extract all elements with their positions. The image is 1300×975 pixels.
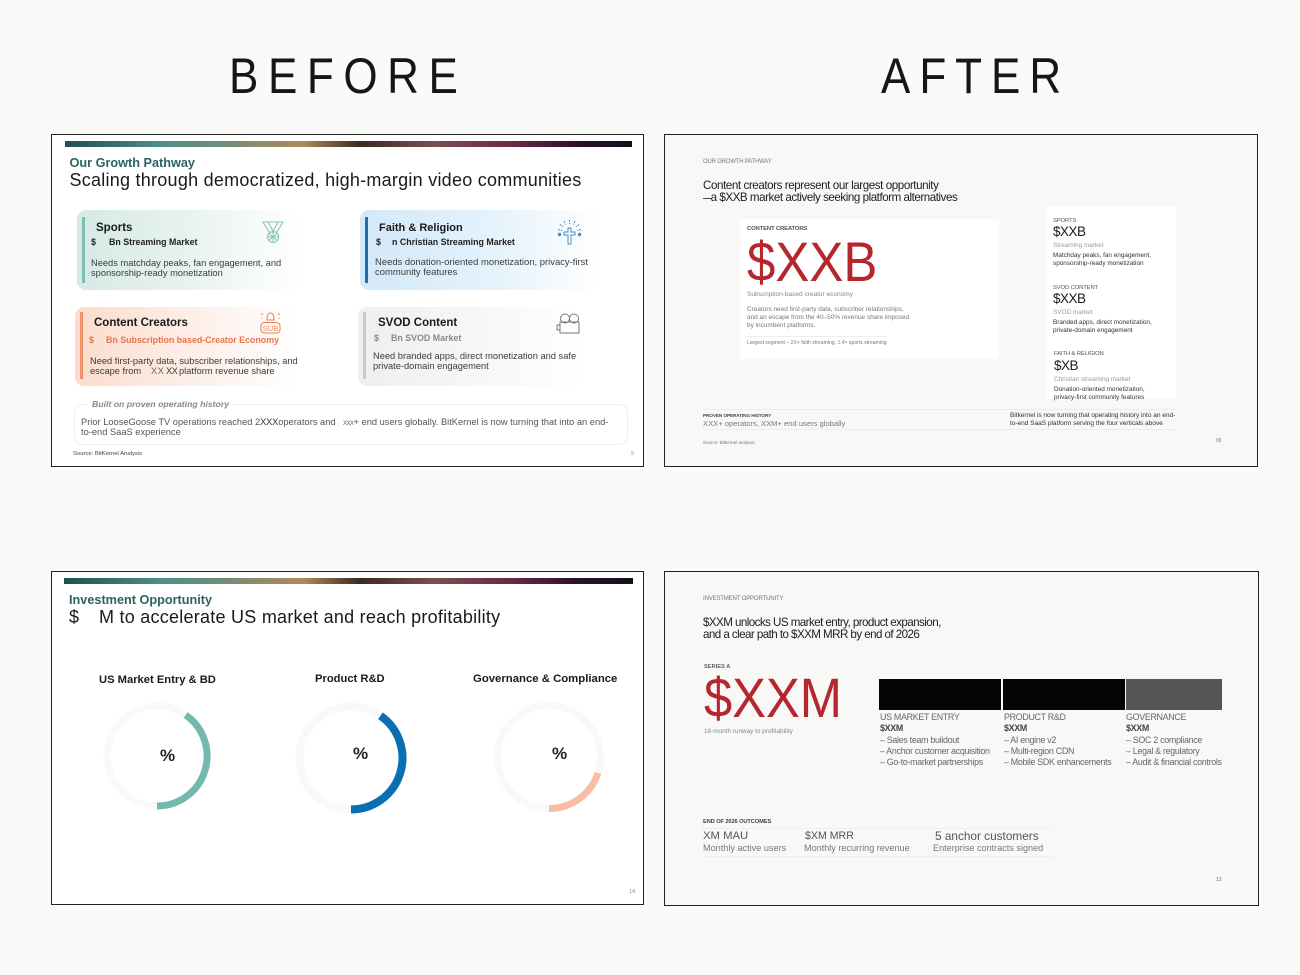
card: sports [77, 210, 302, 290]
icon: film camera [556, 314, 580, 334]
slide eyebrow: Investment Opportunity [69, 592, 212, 606]
card: content creators: Need first-party data, subscriber relationships, and [90, 356, 298, 366]
strip: proven operating history: to-end SaaS platform serving the four verticals above [1010, 420, 1163, 427]
slide title: Scaling through democratized, high-margin video communities [70, 170, 582, 190]
outcomes heading: END OF 2026 OUTCOMES [703, 818, 771, 824]
outcomes strip: Monthly active users [703, 843, 786, 853]
vertical: sports: sponsorship-ready monetization [1053, 260, 1144, 267]
card: content creators: Bn Subscription based-Creator Economy [106, 335, 279, 345]
hero number: $XXM [704, 666, 842, 729]
card: content creators hero: Largest segment – 2X+ faith streaming, 1.4× sports streaming [747, 340, 887, 346]
strip: proven operating history [703, 409, 1176, 430]
slide eyebrow: INVESTMENT OPPORTUNITY [703, 595, 783, 602]
outcomes strip: Enterprise contracts signed [933, 843, 1043, 853]
vertical: svod content: private-domain engagement [1053, 327, 1133, 334]
card: sports: Sports [96, 222, 132, 234]
donut chart: product r and d [351, 712, 407, 814]
icon: subscribe bell: SUB [263, 324, 278, 333]
strip: proven operating history: XXX+ operators, XXM+ end users globally [703, 419, 845, 428]
column: governance [1126, 712, 1222, 767]
column: product r and d: – Mobile SDK enhancements [1004, 757, 1111, 767]
panel: other verticals [1046, 206, 1176, 399]
vertical: sports: SPORTS [1053, 218, 1076, 224]
column: governance: $XXM [1126, 723, 1149, 733]
card: content creators: XX [151, 366, 164, 376]
card: sports: Bn Streaming Market [109, 237, 197, 247]
donut chart: us market entry: % [160, 746, 175, 765]
column: us market entry [880, 712, 990, 767]
slide headline: —a $XXB market actively seeking platform alternatives [703, 191, 957, 204]
source note: Source: BitKernel Analysis [73, 451, 142, 457]
column: product r and d: PRODUCT R&D [1004, 712, 1066, 722]
label: product r and d: Product R&D [315, 672, 385, 684]
page number: 14 [629, 889, 635, 895]
vertical: faith and religion [1054, 351, 1145, 401]
column: product r and d [1004, 712, 1112, 767]
column: product r and d: – AI engine v2 [1004, 734, 1056, 744]
label: governance: Governance & Compliance [473, 672, 617, 684]
panel: after investment slide [664, 571, 1259, 906]
strip: proven operating history: PROVEN OPERATING HISTORY [703, 413, 771, 418]
strip: proven operating history: Bitkernel is now turning that operating history into an end- [1010, 412, 1175, 419]
allocation bar [879, 679, 1222, 710]
slide headline [703, 179, 958, 204]
vertical: faith and religion: Christian streaming market [1054, 376, 1130, 383]
heading: after: AFTER [881, 48, 1070, 104]
card: content creators hero: CONTENT CREATORS [747, 226, 807, 232]
column: governance: – Audit & financial controls [1126, 757, 1222, 767]
column: product r and d: $XXM [1004, 723, 1027, 733]
vertical: faith and religion: FAITH & RELIGION [1054, 351, 1104, 357]
outcomes strip: Monthly recurring revenue [804, 843, 910, 853]
column: governance: – SOC 2 compliance [1126, 734, 1202, 744]
icon: subscribe bell [260, 312, 281, 334]
vertical: faith and religion: Donation-oriented monetization, [1054, 386, 1145, 393]
card: faith and religion: Needs donation-oriented monetization, privacy-first [375, 257, 588, 268]
slide headline: and a clear path to $XXM MRR by end of 2026 [703, 628, 919, 641]
card: content creators hero: and an escape from the 40–50% revenue share imposed [747, 314, 909, 321]
series a amount [704, 664, 842, 735]
outcomes strip [703, 828, 1053, 857]
column: us market entry: – Anchor customer acquisition [880, 746, 990, 756]
slide eyebrow: OUR GROWTH PATHWAY [703, 159, 772, 165]
card: faith and religion: $ [376, 237, 381, 247]
card: content creators: $ [89, 335, 94, 345]
card: svod content: $ [374, 333, 379, 343]
card: content creators: escape from [90, 366, 141, 376]
panel: after growth pathway slide [664, 134, 1258, 467]
card: faith and religion: n Christian Streaming Market [392, 237, 515, 247]
vertical: sports [1053, 218, 1151, 267]
card: svod content: SVOD Content [378, 316, 457, 328]
series a amount: SERIES A [704, 664, 730, 670]
outcomes strip: 5 anchor customers [935, 829, 1039, 843]
card: content creators hero: Creators need first-party data, subscriber relationships, [747, 306, 904, 313]
vertical: faith and religion: privacy-first community features [1054, 394, 1144, 401]
slide eyebrow: Our Growth Pathway [70, 156, 195, 170]
slide headline: Content creators represent our largest opportunity [703, 179, 938, 192]
vertical: svod content: SVOD CONTENT [1053, 285, 1098, 291]
vertical: sports: $XXB [1053, 224, 1086, 239]
gradient header bar [64, 578, 633, 584]
vertical: svod content [1053, 285, 1152, 334]
callout legend: Built on proven operating history [92, 399, 229, 409]
icon: cross with rays [558, 220, 582, 244]
panel: before investment slide: M to accelerate US market and reach profitability [99, 607, 500, 627]
card: svod content: Bn SVOD Market [391, 333, 461, 343]
vertical: sports: Streaming market [1053, 242, 1103, 249]
page number: 9 [631, 451, 634, 457]
card: content creators: platform revenue share [179, 366, 275, 376]
card: sports: Needs matchday peaks, fan engagement, and [91, 258, 281, 268]
card: svod content [358, 307, 583, 386]
donut chart: governance: % [552, 744, 567, 763]
outcomes strip: $XM MRR [805, 830, 854, 842]
vertical: faith and religion: $XB [1054, 358, 1078, 373]
card: svod content: private-domain engagement [373, 361, 489, 371]
column: us market entry: US MARKET ENTRY [880, 712, 960, 722]
page number: 09 [1216, 438, 1222, 444]
series a amount: 18-month runway to profitability [704, 728, 793, 735]
card: content creators: XX [166, 366, 177, 376]
card: content creators hero: by incumbent platforms. [747, 322, 815, 329]
column: governance: – Legal & regulatory [1126, 746, 1199, 756]
page number: 13 [1216, 877, 1222, 883]
column: governance: GOVERNANCE [1126, 712, 1186, 722]
callout: operating history: Prior LooseGoose TV operations reached 2XXXoperators and [81, 417, 336, 427]
card: sports: $ [91, 237, 96, 247]
card: sports: sponsorship-ready monetization [91, 268, 223, 278]
card: content creators hero: Subscription-based creator economy [747, 291, 853, 298]
donut chart: us market entry [157, 712, 211, 810]
vertical: svod content: Branded apps, direct monetization, [1053, 319, 1152, 326]
callout: operating history: XXX+ end users globally. BitKernel is now turning that into an end- [343, 417, 608, 427]
panel: before investment slide [51, 571, 644, 905]
vertical: svod content: $XXB [1053, 291, 1086, 306]
card: faith and religion: Faith & Religion [379, 222, 463, 234]
card: svod content: Need branded apps, direct monetization and safe [373, 350, 576, 360]
card: faith and religion: community features [375, 267, 457, 278]
donut chart: governance [549, 744, 602, 812]
hero number: $XXB [747, 230, 877, 293]
slide title: $ [69, 607, 79, 627]
donut chart: product r and d: % [353, 744, 368, 763]
card: content creators hero [740, 219, 999, 359]
card: content creators [75, 307, 300, 386]
heading: before: BEFORE [229, 48, 467, 104]
vertical: sports: Matchday peaks, fan engagement, [1053, 252, 1151, 259]
panel: before growth pathway slide [51, 134, 644, 467]
card: content creators: Content Creators [94, 316, 188, 328]
slide headline: $XXM unlocks US market entry, product expansion, [703, 616, 941, 628]
gradient header bar [65, 141, 632, 147]
column: us market entry: – Go-to-market partnerships [880, 757, 983, 767]
card: faith and religion [360, 210, 600, 290]
source note: Source: Bitkernel analysis [703, 440, 755, 445]
column: product r and d: – Multi-region CDN [1004, 746, 1074, 756]
label: us market entry: US Market Entry & BD [99, 674, 216, 686]
outcomes strip: XM MAU [703, 830, 748, 842]
slide headline [703, 616, 941, 641]
callout: operating history: to-end SaaS experience [81, 427, 181, 437]
vertical: svod content: SVOD market [1053, 309, 1092, 316]
callout: operating history [74, 404, 628, 445]
column: us market entry: $XXM [880, 723, 903, 733]
icon: medal [262, 222, 284, 243]
column: us market entry: – Sales team buildout [880, 734, 959, 744]
